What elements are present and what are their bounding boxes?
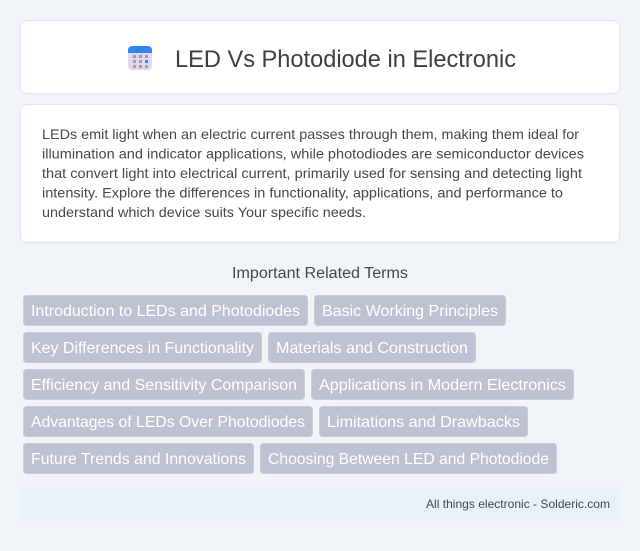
icon: calendar bbox=[128, 46, 152, 70]
title: LED Vs Photodiode in Electronic bbox=[175, 46, 516, 73]
tag: Efficiency and Sensitivity Comparison bbox=[31, 377, 297, 394]
tag list bbox=[24, 296, 574, 474]
heading: related terms: Important Related Terms bbox=[232, 265, 408, 282]
tag bbox=[24, 444, 254, 474]
tag: Advantages of LEDs Over Photodiodes bbox=[31, 414, 305, 431]
tag: Choosing Between LED and Photodiode bbox=[268, 451, 549, 468]
tag: Key Differences in Functionality bbox=[31, 340, 254, 357]
panel: description bbox=[20, 104, 620, 242]
tag: Future Trends and Innovations bbox=[31, 451, 246, 468]
tag bbox=[24, 296, 308, 326]
tag: Limitations and Drawbacks bbox=[327, 414, 520, 431]
tag bbox=[268, 332, 476, 362]
tag bbox=[320, 406, 528, 436]
tag: Materials and Construction bbox=[276, 340, 468, 357]
tag bbox=[24, 406, 312, 436]
footer bbox=[20, 487, 620, 521]
text block: description: that convert light into electrical current, primarily used for sensing and detecting light bbox=[42, 165, 582, 181]
text block: description: illumination and indicator applications, while photodiodes are semiconductor devices bbox=[42, 146, 584, 162]
text block: description bbox=[42, 126, 584, 220]
tag: Basic Working Principles bbox=[322, 303, 498, 320]
tag bbox=[312, 370, 574, 400]
text block: description: intensity. Explore the differences in functionality, applications, and performance to bbox=[42, 184, 563, 200]
tag: Introduction to LEDs and Photodiodes bbox=[31, 303, 300, 320]
tag bbox=[314, 296, 506, 326]
tag bbox=[24, 370, 304, 400]
header panel bbox=[20, 20, 620, 94]
tag bbox=[260, 444, 556, 474]
text block: description: LEDs emit light when an electric current passes through them, making them ideal for bbox=[42, 126, 579, 142]
text block: description: understand which device suits Your specific needs. bbox=[42, 204, 366, 220]
tag bbox=[24, 332, 262, 362]
footer credit: All things electronic - Solderic.com bbox=[426, 497, 610, 511]
tag: Applications in Modern Electronics bbox=[319, 377, 566, 394]
